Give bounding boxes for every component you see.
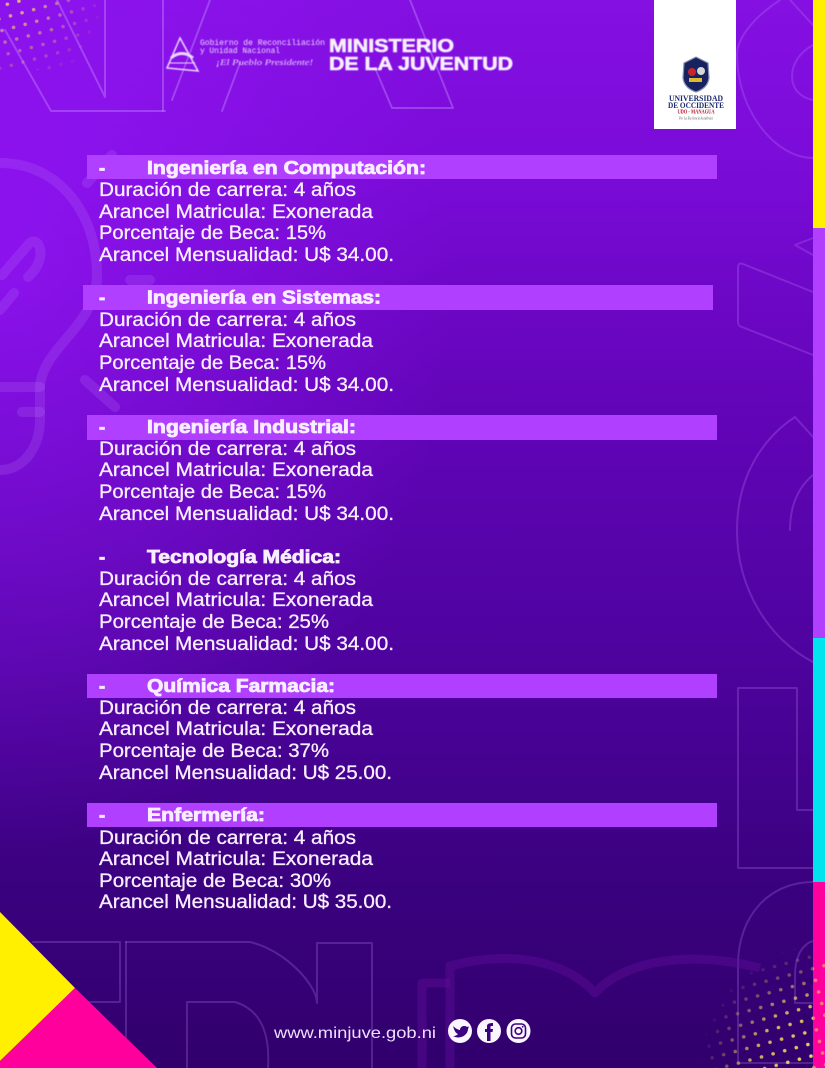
panel: Ingeniería Industrial: Duración de carrera: 4 años xyxy=(99,439,356,460)
panel: Ingeniería Industrial: Arancel Matricula: Exonerada xyxy=(99,460,373,481)
panel: Química Farmacia: Duración de carrera: 4 años xyxy=(99,698,356,719)
panel: Ingeniería en Computación: Duración de carrera: 4 años xyxy=(99,180,356,201)
university name: DE OCCIDENTE xyxy=(668,101,724,110)
icon: instagram xyxy=(506,1019,530,1043)
panel: Química Farmacia xyxy=(87,674,717,784)
icon: twitter xyxy=(448,1019,472,1043)
panel: Enfermería xyxy=(87,803,717,913)
panel: Tecnología Médica: Arancel Mensualidad: U$ 34.00. xyxy=(99,634,394,655)
panel: Química Farmacia: - xyxy=(99,675,105,696)
panel: Ingeniería en Computación: Porcentaje de Beca: 15% xyxy=(99,223,326,244)
icon: university shield xyxy=(683,57,709,92)
panel: Tecnología Médica: Arancel Matricula: Exonerada xyxy=(99,590,373,611)
ministry title xyxy=(329,35,513,74)
panel: Tecnología Médica: Duración de carrera: 4 años xyxy=(99,569,356,590)
ministry title: DE LA JUVENTUD xyxy=(329,53,513,74)
university name: UNIVERSIDAD xyxy=(669,94,723,103)
decorative outlines: right side shapes xyxy=(737,0,813,1063)
website: www.minjuve.gob.ni xyxy=(273,1025,436,1042)
panel: Ingeniería en Computación: Arancel Mensualidad: U$ 34.00. xyxy=(99,245,394,266)
university name xyxy=(668,94,724,120)
icon: triangle emblem xyxy=(167,38,198,71)
dot pattern: bottom right xyxy=(707,950,813,1068)
government text: ¡El Pueblo Presidente! xyxy=(216,58,313,67)
icon: light bulb outline xyxy=(0,155,150,470)
dots over magenta strip xyxy=(813,960,825,1068)
university name: Por La Excelencia Académica xyxy=(678,116,713,120)
logo card: Universidad de Occidente xyxy=(654,0,736,129)
panel: Enfermería: Duración de carrera: 4 años xyxy=(99,828,356,849)
heading: Ingeniería en Sistemas: xyxy=(147,286,381,308)
panel: Ingeniería en Sistemas xyxy=(83,285,713,396)
panel: Ingeniería en Computación xyxy=(87,155,717,266)
decorative outlines: top letters xyxy=(5,0,453,111)
logo: Ministerio de la Juventud xyxy=(167,35,513,74)
panel: Enfermería: - xyxy=(99,804,105,825)
heading: Química Farmacia: xyxy=(147,675,335,696)
decorative outlines: bottom letters xyxy=(33,942,372,1068)
government text xyxy=(200,39,325,67)
panel: Ingeniería en Sistemas: Duración de carrera: 4 años xyxy=(99,310,356,331)
panel: Ingeniería en Computación: - xyxy=(99,157,105,178)
government text: y Unidad Nacional xyxy=(200,47,280,56)
panel: Ingeniería Industrial: - xyxy=(99,416,105,437)
dot pattern: top left xyxy=(0,0,110,70)
panel: Enfermería: Arancel Mensualidad: U$ 35.00. xyxy=(99,892,392,913)
footer: website and social icons xyxy=(273,1019,530,1043)
corner triangles xyxy=(0,912,157,1068)
icon: facebook xyxy=(477,1019,501,1043)
panel: Química Farmacia: Porcentaje de Beca: 37% xyxy=(99,741,329,762)
icon: open book outline xyxy=(422,959,760,1068)
panel: Ingeniería en Computación: Arancel Matricula: Exonerada xyxy=(99,202,373,223)
panel: Enfermería: Porcentaje de Beca: 30% xyxy=(99,871,331,892)
right colour strip xyxy=(813,0,825,1068)
heading: Ingeniería en Computación: xyxy=(147,157,426,178)
ministry title: MINISTERIO xyxy=(329,35,454,56)
panel: Enfermería: Arancel Matricula: Exonerada xyxy=(99,849,373,870)
panel: Ingeniería en Sistemas: Porcentaje de Beca: 15% xyxy=(99,353,326,374)
panel: Ingeniería en Sistemas: Arancel Matricula: Exonerada xyxy=(99,331,373,352)
panel: Tecnología Médica xyxy=(99,546,394,655)
heading: Ingeniería Industrial: xyxy=(147,416,356,437)
panel: Ingeniería Industrial: Arancel Mensualidad: U$ 34.00. xyxy=(99,504,394,525)
panel: Tecnología Médica: - xyxy=(99,546,105,567)
heading: Enfermería: xyxy=(147,804,265,825)
university name: UDO - MANAGUA xyxy=(678,110,715,116)
panel: Ingeniería Industrial: Porcentaje de Beca: 15% xyxy=(99,482,326,503)
government text: Gobierno de Reconciliación xyxy=(200,39,325,48)
panel: Tecnología Médica: Porcentaje de Beca: 25% xyxy=(99,612,329,633)
panel: Química Farmacia: Arancel Matricula: Exonerada xyxy=(99,719,373,740)
panel: Ingeniería Industrial xyxy=(87,415,717,525)
panel: Ingeniería en Sistemas: Arancel Mensualidad: U$ 34.00. xyxy=(99,375,394,396)
panel: Ingeniería en Sistemas: - xyxy=(99,286,105,308)
panel: Química Farmacia: Arancel Mensualidad: U$ 25.00. xyxy=(99,763,392,784)
heading: Tecnología Médica: xyxy=(147,546,341,567)
